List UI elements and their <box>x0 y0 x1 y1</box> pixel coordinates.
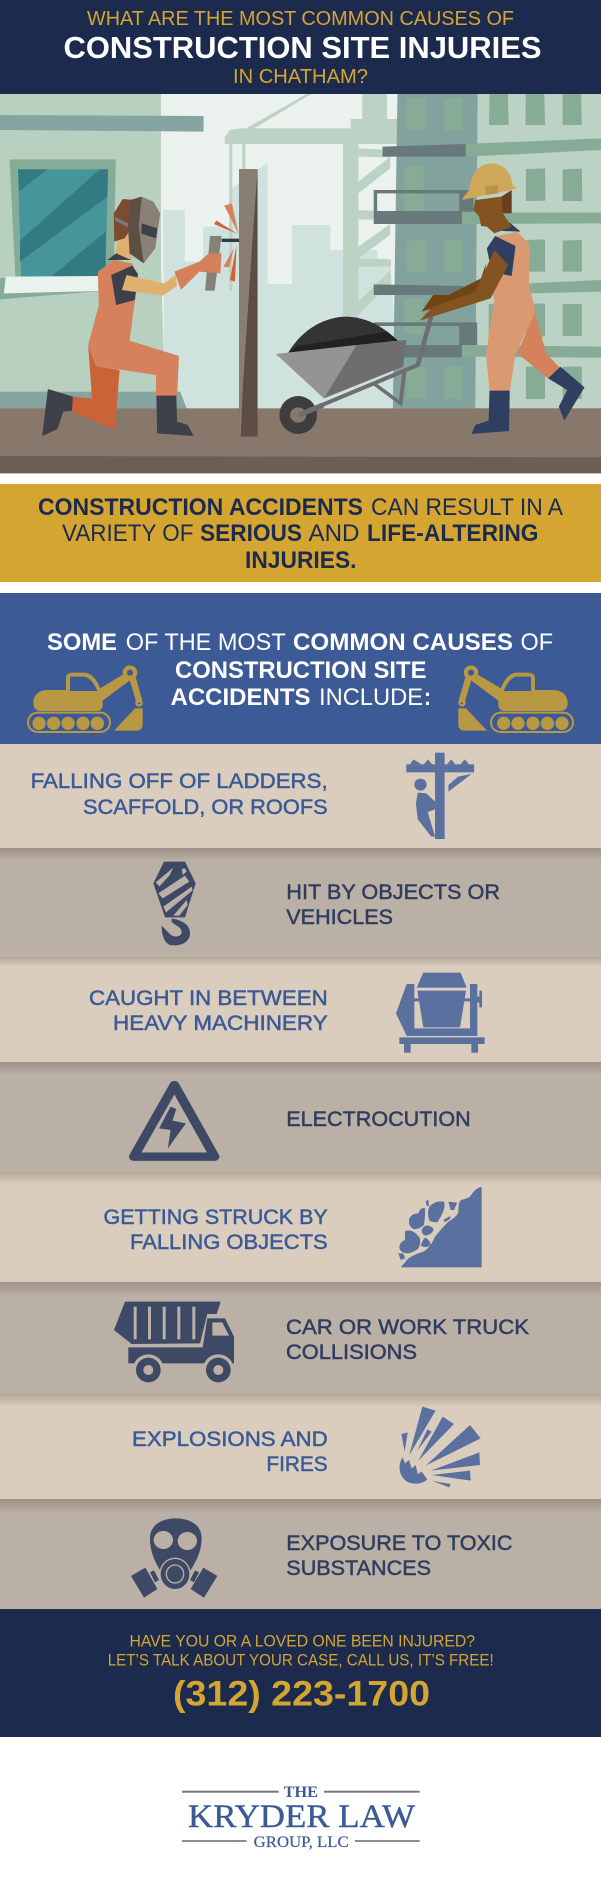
row 1 text <box>31 769 328 819</box>
scaffold slabs <box>374 144 477 357</box>
right building windows and bands <box>462 94 601 399</box>
intro line 1: CAN RESULT IN A <box>371 494 563 521</box>
row 1 text: FALLING OFF OF LADDERS, <box>31 769 328 793</box>
central tower <box>393 94 478 408</box>
intro line 2 <box>62 520 538 547</box>
intro line 2: AND <box>308 520 360 547</box>
title line 1: WHAT ARE THE MOST COMMON CAUSES OF <box>87 8 514 30</box>
call to action line 2: LET’S TALK ABOUT YOUR CASE, CALL US, IT’S FREE! <box>108 1650 494 1670</box>
row 3 text: HEAVY MACHINERY <box>113 1011 328 1035</box>
heading line 1: OF THE MOST <box>126 629 286 656</box>
logo line: group llc: GROUP, LLC <box>254 1834 349 1851</box>
row 5 text <box>104 1205 328 1254</box>
heading line 3: ACCIDENTS <box>170 684 310 711</box>
row 4 text: ELECTROCUTION <box>286 1107 471 1131</box>
crane <box>225 94 399 317</box>
panel: row 5 falling objects <box>0 1172 601 1282</box>
logo line: the: THE <box>284 1784 318 1801</box>
row 6 text: COLLISIONS <box>286 1340 417 1364</box>
icon: high voltage triangle <box>134 1085 215 1157</box>
row 7 text: EXPLOSIONS AND <box>132 1427 328 1451</box>
icon: rockslide <box>398 1187 482 1267</box>
panel: row 7 explosions <box>0 1393 601 1499</box>
illustration: construction site with welder and worker <box>0 94 601 473</box>
heading line 1: SOME <box>47 629 117 656</box>
sky and distant buildings <box>160 94 399 409</box>
row 2 text <box>286 880 500 929</box>
left building <box>0 94 204 409</box>
panel: title header <box>0 0 601 94</box>
icon: excavator left <box>28 665 143 732</box>
row 3 text <box>89 986 328 1035</box>
row 1 text: SCAFFOLD, OR ROOFS <box>83 795 328 819</box>
panel: call to action footer <box>0 1609 601 1737</box>
phone number: (312) 223-1700 <box>173 1674 430 1714</box>
panel: row 8 toxic substances <box>0 1499 601 1609</box>
row 8 text: EXPOSURE TO TOXIC <box>286 1531 512 1555</box>
intro line 2: VARIETY OF <box>62 520 194 547</box>
heading line 2: CONSTRUCTION SITE <box>175 657 426 684</box>
worker figure <box>420 163 585 434</box>
row 5 text: GETTING STRUCK BY <box>104 1205 328 1229</box>
intro line 1: CONSTRUCTION ACCIDENTS <box>38 494 363 521</box>
heading line 3: INCLUDE <box>319 684 423 711</box>
icon: dump truck <box>114 1302 234 1386</box>
row 3 text: CAUGHT IN BETWEEN <box>89 986 328 1010</box>
welding post <box>239 169 258 437</box>
heading line 1: OF <box>520 629 553 656</box>
row 7 text <box>132 1427 328 1476</box>
icon: explosion burst <box>400 1407 481 1487</box>
welder figure <box>42 197 239 436</box>
row 5 text: FALLING OBJECTS <box>130 1230 328 1254</box>
logo: The Kryder Law Group <box>182 1784 420 1851</box>
heading line 3 <box>170 684 431 711</box>
icon: utility pole climber <box>406 753 474 839</box>
title line 2: CONSTRUCTION SITE INJURIES <box>64 30 542 65</box>
heading line 1 <box>47 629 553 656</box>
row 6 text <box>286 1315 530 1364</box>
panel: gold intro banner <box>0 484 601 582</box>
welding sparks <box>214 203 238 282</box>
title line 3: IN CHATHAM? <box>233 66 368 88</box>
panel: blue section heading <box>0 593 601 744</box>
row 8 text: SUBSTANCES <box>286 1556 431 1580</box>
icon: cement mixer <box>396 973 485 1053</box>
intro line 3: INJURIES. <box>245 547 356 574</box>
intro line 1 <box>38 494 563 521</box>
panel: row 6 truck collisions <box>0 1282 601 1393</box>
icon: excavator right <box>458 665 573 732</box>
row 6 text: CAR OR WORK TRUCK <box>286 1315 530 1339</box>
icon: crane hook <box>153 862 196 945</box>
heading line 3: : <box>424 684 431 711</box>
row 7 text: FIRES <box>266 1452 328 1476</box>
logo line: kryder law: KRYDER LAW <box>188 1799 416 1835</box>
icon: gas mask <box>131 1518 217 1598</box>
row 2 text: HIT BY OBJECTS OR <box>286 880 500 904</box>
row 8 text <box>286 1531 512 1580</box>
intro line 2: SERIOUS <box>200 520 302 547</box>
wheelbarrow <box>276 317 431 434</box>
panel: row 4 electrocution <box>0 1062 601 1172</box>
panel: row 3 heavy machinery <box>0 957 601 1062</box>
call to action line 1: HAVE YOU OR A LOVED ONE BEEN INJURED? <box>130 1632 475 1650</box>
panel: row 1 falling <box>0 744 601 848</box>
row 2 text: VEHICLES <box>286 905 393 929</box>
panel: row 2 hit by objects <box>0 848 601 957</box>
intro line 2: LIFE-ALTERING <box>367 520 538 547</box>
ground <box>0 408 601 473</box>
heading line 1: COMMON CAUSES <box>293 629 513 656</box>
